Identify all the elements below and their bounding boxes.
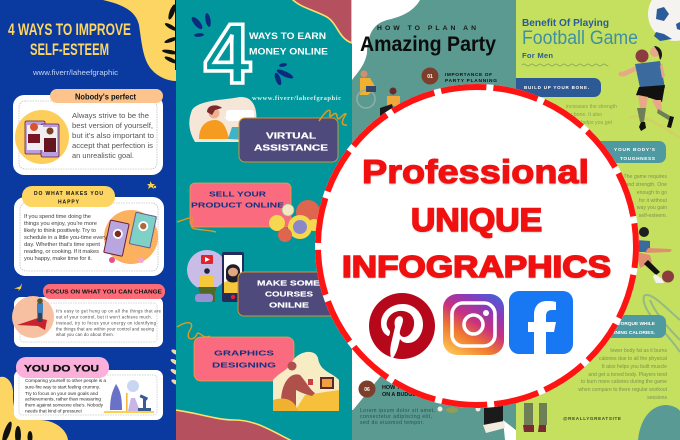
illustration: designer at desk <box>273 352 339 411</box>
card: do what makes you happy: reading, or cooking. If it makes <box>24 249 99 255</box>
badge: torque while burning calories <box>590 315 666 338</box>
text: calories benefit: lower body fat as it burns <box>610 348 667 354</box>
text: lorem <box>360 408 435 426</box>
ring and social icons <box>315 84 639 408</box>
headline: unique: UNIQUE <box>411 202 542 238</box>
text: toughness benefit: for it without <box>639 198 668 204</box>
scribble: orange lower left <box>177 217 216 232</box>
card: you do you <box>14 357 163 420</box>
card: you do you: sure-fire way to start feeling crummy. <box>25 384 100 390</box>
card: focus on what you can change: It's easy to get hung up on all the things that are <box>56 308 162 314</box>
icon: facebook <box>509 291 573 354</box>
card: virtual assistance: VIRTUAL <box>266 132 316 140</box>
card: virtual assistance: ASSISTANCE <box>254 144 329 152</box>
card: nobody's perfect: Always strive to be the <box>72 111 149 120</box>
card: focus on what you can change: FOCUS ON WHAT YOU CAN CHANGE <box>46 290 162 296</box>
card: make some courses online: MAKE SOME <box>257 278 320 288</box>
heading: WAYS TO EARN <box>249 31 326 41</box>
scribble: orange middle <box>177 323 210 339</box>
card: graphics designing <box>194 337 294 381</box>
blob: bottom left yellow <box>0 377 68 440</box>
text: calories benefit: sessions <box>647 395 667 401</box>
card: focus on what you can change <box>12 284 165 347</box>
icon: black leaves top <box>162 0 178 70</box>
card: you do you: Try to focus on your own goals and <box>25 391 98 397</box>
heading: amazing party: Amazing Party <box>360 33 496 56</box>
icon: pinterest <box>369 293 435 359</box>
text: calories benefit: and get a toned body. Players tend <box>588 372 667 378</box>
blob: bottom left white <box>352 340 400 410</box>
card: do what makes you happy <box>14 186 164 276</box>
icon: blue leaves <box>190 13 294 86</box>
step 01: PARTY PLANNING <box>445 78 497 84</box>
illustration: party people <box>357 70 400 116</box>
illustration: standing legs <box>523 403 547 432</box>
text: calories benefit: to burn more calories during the game <box>581 379 667 385</box>
title <box>8 20 131 59</box>
panel: how to plan an amazing party <box>352 0 516 440</box>
text: lorem: consectetur adipiscing elit, <box>360 414 432 420</box>
text: calories benefit: when compare to there regular workout <box>578 387 668 393</box>
text: toughness benefit: way you gain <box>637 205 667 211</box>
text: calories benefit: calories due to all the physical <box>599 356 667 362</box>
icon: sparkle <box>147 181 156 189</box>
card: focus on what you can change: the things that are within your control and seeing <box>56 326 155 332</box>
headline: professional: Professional <box>362 153 589 190</box>
illustration: player kicking ball <box>636 227 674 283</box>
url: www.fiverr/laheefgraphic <box>32 68 118 77</box>
card: do what makes you happy: schedule in a little you-time every <box>24 235 107 241</box>
card: nobody's perfect <box>13 89 163 175</box>
url: wwww.fiverr/laheefgraphic <box>252 95 341 102</box>
text: toughness benefit <box>623 174 668 219</box>
panel: 4 ways to earn money online <box>176 0 352 440</box>
card: graphics designing: DESIGNING <box>212 360 276 370</box>
card: do what makes you happy: likely to think positively. Try to <box>24 228 96 234</box>
badge: build up your bone: BUILD UP YOUR BONE. <box>524 85 589 90</box>
headline: infographics: INFOGRAPHICS <box>342 249 611 284</box>
text: toughness benefit: The game requires <box>623 174 667 180</box>
icon: soccer ball <box>648 0 680 41</box>
card: focus on what you can change: out of your control, but it won't achieve much. <box>56 314 152 320</box>
card: virtual assistance <box>239 118 338 162</box>
step 01: 01 <box>427 74 433 80</box>
card: make some courses online: COURSES <box>265 290 313 298</box>
text: bone benefit <box>562 104 617 126</box>
card: you do you: needs that kind of pressure! <box>25 408 82 414</box>
big number 4: 4 <box>204 7 251 102</box>
card: do what makes you happy: DO WHAT MAKES YOU <box>34 191 103 197</box>
icon: peach plant at edge <box>170 348 180 386</box>
badge: torque while burning calories: TORQUE WHILE <box>618 321 656 327</box>
blob: bottom right white <box>503 420 517 440</box>
card: graphics designing: GRAPHICS <box>214 348 274 358</box>
subheading: For Men <box>522 51 553 60</box>
card: make some courses online <box>238 272 348 316</box>
blob: bottom right teal <box>638 405 680 440</box>
icon: black leaves bottom <box>0 421 32 440</box>
heading: HOW TO PLAN AN <box>377 25 476 32</box>
text: calories benefit: It also helps you built muscle <box>602 364 667 370</box>
card: sell your product online: PRODUCT ONLINE <box>191 200 284 210</box>
step 01 <box>422 68 497 84</box>
card: sell your product online: SELL YOUR <box>209 190 267 198</box>
text: bone benefit: your bone. It also <box>562 112 602 118</box>
card: do what makes you happy: day. Whether that's time spent <box>24 242 100 248</box>
card: you do you: achievements, rather than measuring <box>25 396 101 402</box>
badge: your body's toughness: YOUR BODY'S <box>614 147 656 153</box>
step 06: 06 <box>364 387 370 393</box>
icon: decorative circles <box>269 200 320 242</box>
card: nobody's perfect: Nobody's perfect <box>75 92 136 102</box>
text: toughness benefit: self-esteem. <box>639 213 667 219</box>
panel: benefit of playing football game <box>516 0 680 440</box>
card: nobody's perfect: but it's also important to <box>72 131 154 140</box>
card: you do you: them against someone else's. Nobody <box>25 402 104 408</box>
title: SELF-ESTEEM <box>30 40 109 59</box>
icon: star <box>14 283 22 291</box>
card: make some courses online: ONILNE <box>269 300 309 310</box>
blob: bottom red <box>174 410 294 440</box>
card: focus on what you can change: what you can do about them. <box>56 332 114 337</box>
text: handle: @REALLYGREATSITE <box>563 416 621 421</box>
blob: top right red <box>291 0 352 43</box>
text: bone benefit: increases the strength <box>566 104 617 110</box>
step 01: IMPORTANCE OF <box>445 72 492 78</box>
card: sell your product online <box>190 183 291 227</box>
panel: 4 ways to improve self-esteem <box>0 0 176 440</box>
badge: your body's toughness <box>590 141 666 163</box>
card: you do you: YOU DO YOU <box>24 364 99 374</box>
text: lorem: Lorem ipsum dolor sit amet, <box>360 408 435 414</box>
badge: central white circle <box>315 84 639 408</box>
illustration: player heading ball <box>618 46 674 131</box>
badge: build up your bone <box>510 78 601 97</box>
blob: top right yellow <box>103 0 176 81</box>
heading <box>249 31 328 56</box>
blob: top left white <box>352 0 420 80</box>
illustration: support agent <box>189 97 256 142</box>
card: nobody's perfect: best version of yourself, <box>72 121 153 130</box>
icon: rocket and microscope <box>104 380 154 413</box>
badge: torque while burning calories: BURNING CALORIES. <box>605 330 655 336</box>
heading: football game: Football Game <box>522 28 638 49</box>
text: lorem: sed do eiusmod tempor. <box>360 420 424 426</box>
illustration: legs <box>438 400 505 433</box>
badge: your body's toughness: TOUGHNESS <box>620 156 656 162</box>
heading: Benefit Of Playing <box>522 17 609 29</box>
step 06: HOW TO PLAN <box>382 385 420 391</box>
text: toughness benefit: and strength. One <box>625 182 667 188</box>
card: focus on what you can change: Instead, try to focus your energy on identifying <box>56 320 157 326</box>
card: you do you: Comparing yourself to other people is a <box>25 378 106 384</box>
card: nobody's perfect: an unrealistic goal. <box>72 151 134 160</box>
step 06: ON A BUDGET <box>382 392 420 398</box>
card: do what makes you happy: HAPPY <box>58 200 80 206</box>
text: toughness benefit: enough to go <box>637 190 667 196</box>
text: calories benefit <box>578 348 668 401</box>
text: bone benefit: helps you get <box>581 120 613 126</box>
scribble: orange <box>319 110 347 125</box>
icon: instagram <box>443 294 504 355</box>
card: do what makes you happy: things you enjoy, you're more <box>24 221 97 227</box>
card: do what makes you happy: If you spend time doing the <box>24 214 91 220</box>
step 06 <box>358 380 420 398</box>
heading: MONEY ONLINE <box>249 46 328 56</box>
illustration: video course creator <box>187 250 244 302</box>
card: nobody's perfect: accept that perfection is <box>72 141 153 150</box>
card: do what makes you happy: you happy, make time for it. <box>24 256 92 262</box>
